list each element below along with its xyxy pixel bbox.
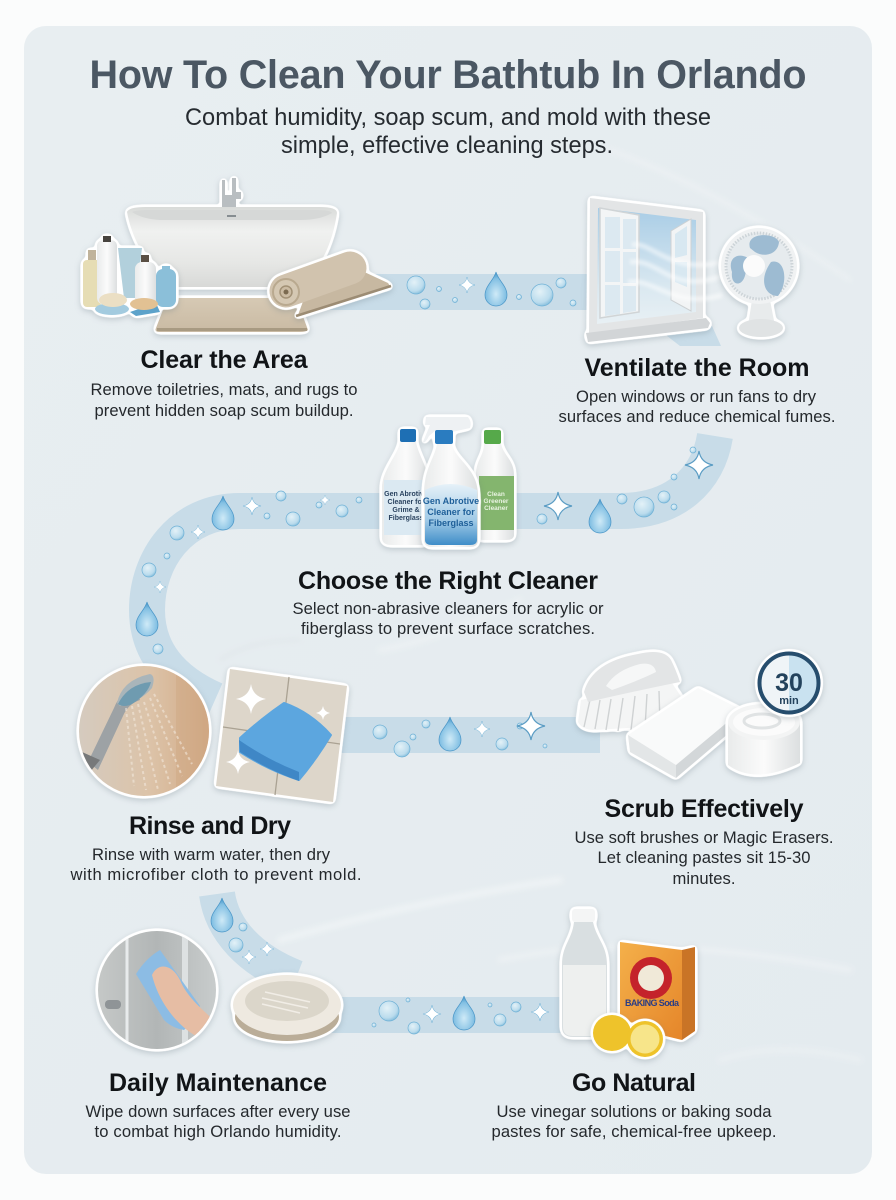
icon: spray bottle: Cleaner for	[427, 507, 475, 517]
icon: open window and fan	[586, 198, 797, 342]
icon: green bottle	[476, 430, 514, 540]
step: go natural: Use vinegar solutions or baking soda	[496, 1102, 772, 1121]
step: choose the right cleaner: Choose the Right Cleaner	[298, 567, 598, 595]
title: How To Clean Your Bathtub In Orlando	[90, 53, 806, 97]
step: go natural	[492, 1069, 776, 1141]
icon: left blue bottle: Grime &	[392, 507, 420, 514]
step: choose the right cleaner: fiberglass to prevent surface scratches.	[301, 619, 595, 638]
subtitle: Combat humidity, soap scum, and mold with these	[185, 105, 711, 131]
icon: spray bottle	[423, 417, 479, 547]
subtitle	[185, 105, 711, 159]
step: scrub effectively: minutes.	[672, 869, 736, 888]
icon: brush, sponge, paste and timer	[578, 652, 820, 778]
icon: desk fan	[721, 228, 797, 337]
icon: green bottle: Clean	[487, 491, 505, 498]
icon: lemons	[593, 1015, 663, 1057]
step: scrub effectively: Scrub Effectively	[604, 795, 804, 823]
step: daily maintenance: to combat high Orlando humidity.	[94, 1122, 342, 1141]
step: rinse and dry: with microfiber cloth to prevent mold.	[70, 865, 362, 884]
icon: left blue bottle	[382, 429, 430, 545]
icon: cleaning paste jar	[728, 704, 800, 775]
step: rinse and dry: Rinse with warm water, then dry	[92, 845, 331, 864]
icon: bath mat	[156, 298, 308, 332]
icon: shower head photo	[78, 666, 210, 800]
icon: left blue bottle: Cleaner for	[388, 499, 425, 506]
icon: baking soda box: BAKING Soda	[625, 998, 680, 1008]
step: go natural: pastes for safe, chemical-free upkeep.	[492, 1122, 776, 1141]
step: choose the right cleaner	[292, 567, 604, 638]
step: ventilate the room: Ventilate the Room	[584, 354, 810, 382]
icon: tile and blue microfiber cloth	[216, 669, 347, 802]
icon: green bottle: Greener	[484, 498, 509, 505]
icon: spray bottle: Gen Abrotive	[423, 496, 479, 506]
step: clear the area	[90, 346, 358, 420]
step: clear the area: Remove toiletries, mats, and rugs to	[90, 380, 358, 399]
step: ventilate the room	[558, 354, 836, 426]
icon: window	[586, 198, 710, 342]
step: go natural: Go Natural	[572, 1069, 696, 1097]
step: ventilate the room: Open windows or run fans to dry	[576, 387, 817, 406]
icon: baking soda box	[620, 942, 695, 1040]
icon: toiletries	[83, 236, 176, 316]
subtitle: simple, effective cleaning steps.	[281, 133, 613, 159]
step: scrub effectively: Use soft brushes or Magic Erasers.	[574, 828, 834, 847]
step: rinse and dry: Rinse and Dry	[129, 812, 291, 840]
icon: green bottle: Cleaner	[484, 505, 508, 512]
step: daily maintenance	[86, 1069, 350, 1141]
step: rinse and dry	[70, 812, 362, 884]
water drops and bubbles	[136, 272, 713, 1034]
step: ventilate the room: surfaces and reduce chemical fumes.	[558, 407, 836, 426]
airflow lines	[628, 245, 722, 299]
icon: scrub brush	[578, 652, 682, 731]
icon: bathtub with mats and toiletries	[83, 178, 391, 332]
step: daily maintenance: Daily Maintenance	[109, 1069, 327, 1097]
icon: freestanding bathtub	[127, 178, 337, 287]
icon: soap dish	[233, 975, 341, 1041]
icon: vinegar bottle	[562, 909, 607, 1037]
icon: left blue bottle: Gen Abrotive	[384, 491, 428, 498]
icon: left blue bottle: Fiberglass	[388, 515, 424, 522]
icon: 30 minute timer	[758, 652, 820, 714]
icon: rolled mat	[273, 268, 391, 316]
step: daily maintenance: Wipe down surfaces after every use	[86, 1102, 350, 1121]
icon: 30 minute timer: 30	[775, 669, 803, 697]
icon: 30 minute timer: min	[779, 695, 799, 707]
icon: vinegar, baking soda and lemons	[562, 909, 695, 1057]
step: choose the right cleaner: Select non-abrasive cleaners for acrylic or	[292, 599, 604, 618]
icon: spray bottle: Fiberglass	[428, 518, 474, 528]
step: clear the area: prevent hidden soap scum buildup.	[94, 401, 354, 420]
icon: melamine sponge	[628, 688, 742, 778]
step: clear the area: Clear the Area	[140, 346, 309, 374]
icon: hand wiping glass photo	[98, 930, 216, 1050]
step: scrub effectively: Let cleaning pastes sit 15-30	[598, 848, 810, 867]
water path ribbon	[147, 292, 721, 1015]
step: scrub effectively	[574, 795, 834, 888]
icon: cleaner bottles	[382, 417, 514, 547]
